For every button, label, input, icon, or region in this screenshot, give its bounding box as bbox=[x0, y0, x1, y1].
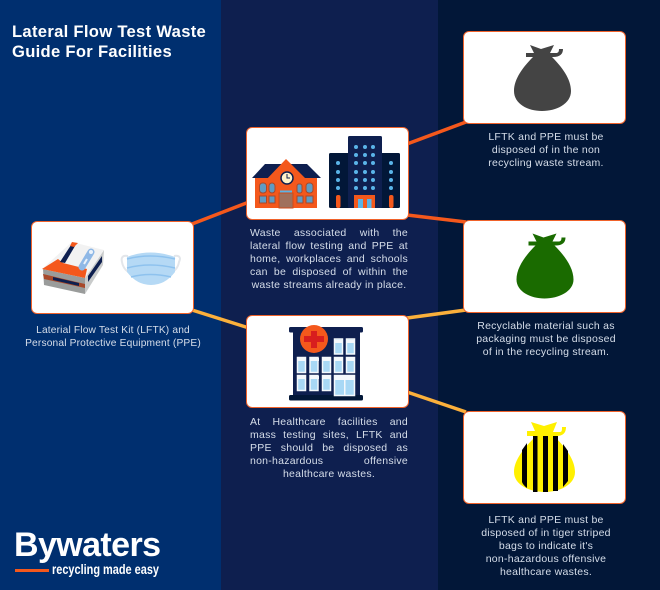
text: healthcare waste description: LFTK bbox=[356, 429, 383, 441]
text: healthcare waste description: mass bbox=[250, 429, 276, 441]
panel: non recycling bag card bbox=[463, 31, 626, 124]
text: home and workplace waste description: flow bbox=[286, 240, 305, 252]
text: non recycling description: recycling waste stream. bbox=[488, 157, 604, 169]
text: home and workplace waste description: workplaces bbox=[286, 253, 341, 265]
title bbox=[12, 22, 206, 60]
logo: Bywaters bbox=[14, 526, 160, 577]
text: test kit caption: Laterial Flow Test Kit (LFTK) and bbox=[36, 325, 190, 336]
text: test kit caption: Personal Protective Equipment (PPE) bbox=[25, 338, 201, 349]
panel: test kit and PPE card bbox=[31, 221, 194, 314]
panel: right column background bbox=[438, 0, 660, 590]
title: Lateral Flow Test Waste bbox=[12, 22, 206, 41]
text: home and workplace waste description: and bbox=[347, 253, 365, 265]
text: recycling description: of in the recycling stream. bbox=[483, 346, 609, 358]
logo tagline: recycling made easy bbox=[52, 562, 159, 577]
text: home and workplace waste description: testing bbox=[310, 240, 343, 252]
text: home and workplace waste description: disposed bbox=[292, 266, 336, 278]
text: non recycling description: disposed of in the non bbox=[492, 144, 600, 156]
text: home and workplace waste description: at bbox=[399, 240, 408, 252]
text: tiger bag description: healthcare wastes. bbox=[500, 566, 592, 578]
panel: home, workplaces and schools card bbox=[246, 127, 409, 220]
text: healthcare waste description: healthcare wastes. bbox=[283, 468, 375, 480]
logo underline bbox=[15, 569, 49, 572]
text: healthcare waste description: offensive bbox=[364, 455, 408, 467]
text: tiger bag description bbox=[481, 514, 611, 578]
text: home and workplace waste description: Waste bbox=[250, 227, 281, 239]
text: home and workplace waste description: and bbox=[348, 240, 367, 252]
text: healthcare waste description: be bbox=[322, 442, 334, 454]
icon: black waste bag bbox=[514, 45, 571, 111]
panel: recycling bag card bbox=[463, 220, 626, 313]
text: tiger bag description: bags to indicate it's bbox=[499, 540, 593, 552]
text: healthcare waste description: sites, bbox=[323, 429, 349, 441]
text: home and workplace waste description: waste streams already in place. bbox=[252, 279, 406, 291]
text: healthcare waste description bbox=[250, 416, 408, 480]
text: home and workplace waste description: PPE bbox=[372, 240, 394, 252]
title: Guide For Facilities bbox=[12, 42, 172, 60]
text: non recycling description: LFTK and PPE must be bbox=[488, 131, 604, 143]
text: home and workplace waste description: can bbox=[250, 266, 268, 278]
text: home and workplace waste description: be bbox=[274, 266, 286, 278]
text: home and workplace waste description: schools bbox=[371, 253, 408, 265]
text: home and workplace waste description: the bbox=[393, 227, 408, 239]
text: home and workplace waste description bbox=[250, 227, 408, 291]
icon: test kit and face mask bbox=[42, 242, 181, 294]
text: tiger bag description: disposed of in tiger striped bbox=[481, 527, 611, 539]
icon: green waste bag bbox=[516, 234, 574, 298]
panel: healthcare facility card bbox=[246, 315, 409, 408]
panel: left column background bbox=[0, 0, 221, 590]
text: healthcare waste description: as bbox=[396, 442, 408, 454]
text: healthcare waste description: disposed bbox=[343, 442, 387, 454]
text: home and workplace waste description: within bbox=[358, 266, 386, 278]
text: home and workplace waste description: the bbox=[393, 266, 408, 278]
text: home and workplace waste description: home, bbox=[250, 253, 280, 265]
text: healthcare waste description: non-hazardous bbox=[250, 455, 323, 467]
text: healthcare waste description: At bbox=[250, 416, 260, 428]
icon: school and office buildings bbox=[252, 136, 400, 208]
text: healthcare waste description: and bbox=[390, 429, 408, 441]
icon: hospital building bbox=[289, 325, 363, 400]
text: test kit caption bbox=[25, 325, 201, 349]
text: tiger bag description: non-hazardous offensive bbox=[486, 553, 606, 565]
text: home and workplace waste description: of bbox=[343, 266, 352, 278]
text: healthcare waste description: should bbox=[281, 442, 313, 454]
text: healthcare waste description: Healthcare bbox=[272, 416, 326, 428]
text: recycling description bbox=[476, 320, 616, 358]
text: healthcare waste description: facilities bbox=[338, 416, 378, 428]
logo wordmark: Bywaters bbox=[14, 526, 160, 564]
text: recycling description: Recyclable material such as bbox=[477, 320, 615, 332]
text: home and workplace waste description: associated bbox=[294, 227, 347, 239]
panel: middle column background bbox=[221, 0, 438, 590]
text: recycling description: packaging must be disposed bbox=[476, 333, 616, 345]
text: healthcare waste description: PPE bbox=[250, 442, 272, 454]
panel: tiger bag card bbox=[463, 411, 626, 504]
text: home and workplace waste description: lateral bbox=[250, 240, 280, 252]
text: non recycling description bbox=[488, 131, 604, 169]
icon: tiger striped bag bbox=[514, 422, 575, 492]
text: healthcare waste description: testing bbox=[283, 429, 316, 441]
text: tiger bag description: LFTK and PPE must be bbox=[488, 514, 604, 526]
text: healthcare waste description: and bbox=[390, 416, 408, 428]
text: home and workplace waste description: with bbox=[360, 227, 379, 239]
